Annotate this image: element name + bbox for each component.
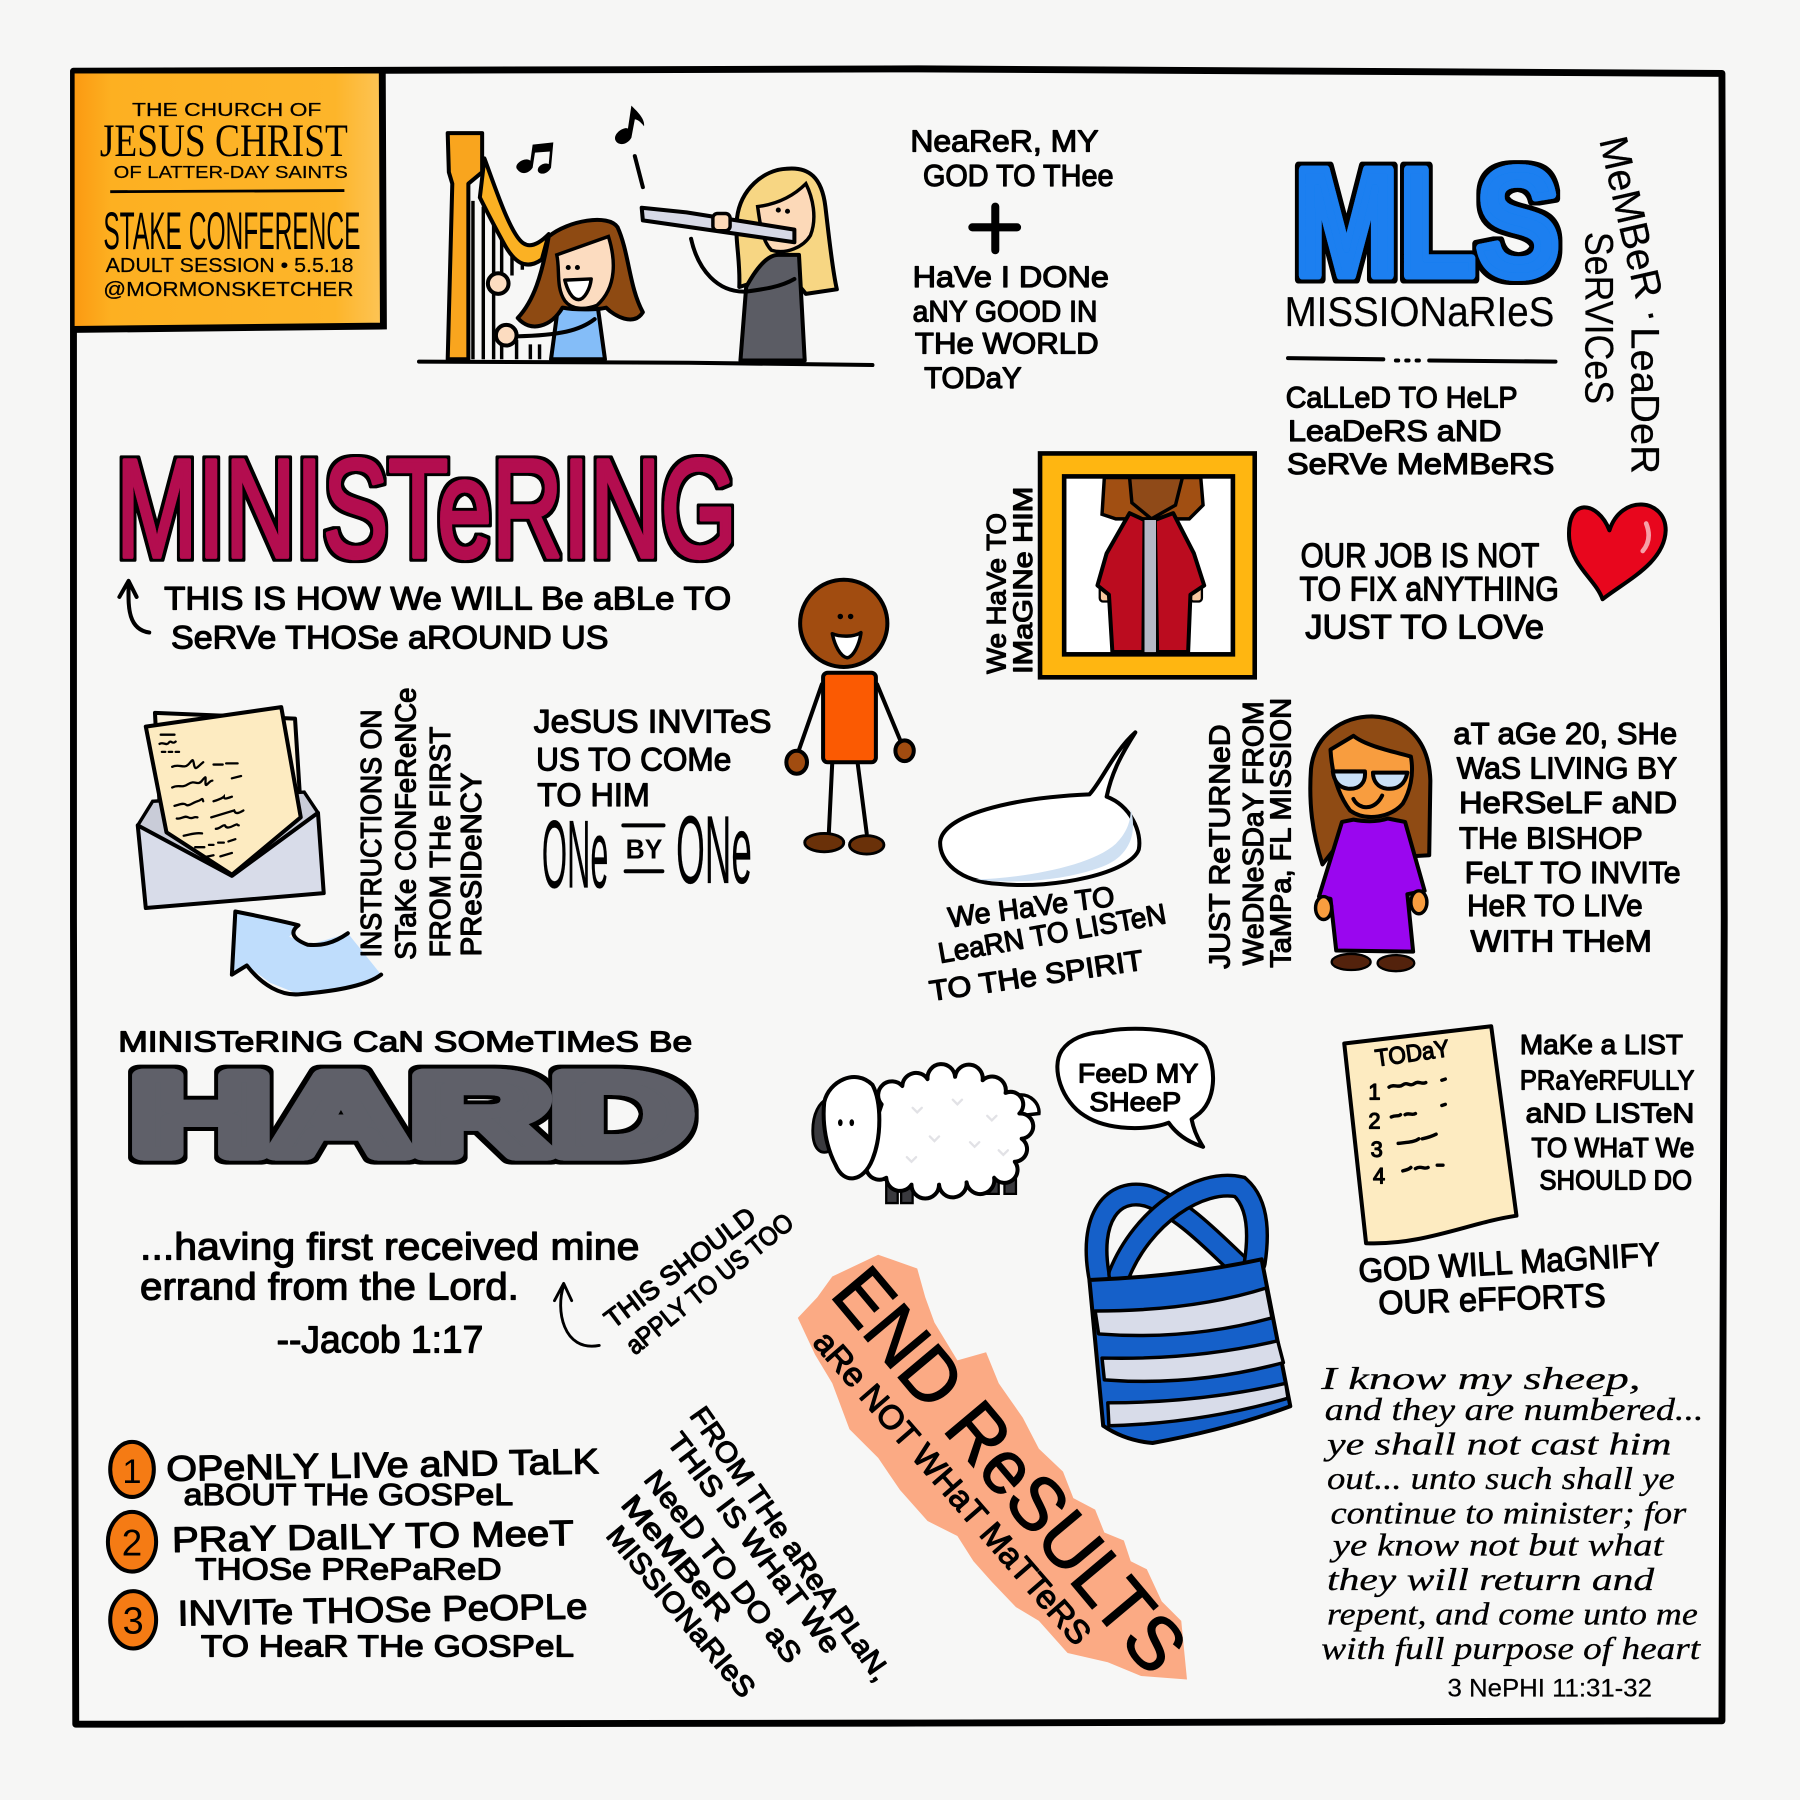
caption: learn to listen to the spirit: LeaRN TO LISTeN <box>936 898 1169 970</box>
icon: checklist paper: 3 <box>1371 1137 1383 1162</box>
badge 1: 1 <box>122 1453 142 1491</box>
subheading with arrow <box>119 581 731 656</box>
icon: checklist paper: 4 <box>1373 1164 1385 1189</box>
heading: MLS: MLS <box>1294 137 1560 309</box>
MLS missionaries block: MISSIONaRIeS <box>1285 289 1554 335</box>
text: at age 20 story: THe BISHOP <box>1459 820 1643 855</box>
vertical text: member leader services: SeRVICeS <box>1576 232 1621 404</box>
icon: sheep <box>813 1064 1039 1203</box>
title block: conference banner: THE CHURCH OF <box>132 99 321 120</box>
text: Jesus invites us one by one <box>534 703 771 908</box>
text: make a list prayerfully: PRaYeRFULLY <box>1520 1064 1694 1095</box>
figure: girl with glasses <box>1310 716 1430 971</box>
text: ministering can sometimes be: MINISTeRING CaN SOMeTIMeS Be <box>118 1027 692 1059</box>
text: our job is not to fix anything <box>1299 537 1559 646</box>
scripture quote: they will return and <box>1327 1561 1655 1597</box>
text: make a list prayerfully: TO WHaT We <box>1531 1132 1694 1163</box>
speech bubble: feed my sheep: FeeD MY <box>1078 1059 1199 1089</box>
text: our job is not to fix anything: OUR JOB IS NOT <box>1301 537 1539 575</box>
text: Jesus invites us one by one: JeSUS INVITeS <box>534 703 771 739</box>
arrow: curved up arrow <box>554 1283 599 1346</box>
vertical text: just returned from Tampa mission <box>1204 698 1297 969</box>
icon: envelope with letter <box>138 707 324 908</box>
diagonal text: from the area plan <box>600 1401 897 1704</box>
illustration: harpist and flautist <box>419 106 872 365</box>
vertical text: instructions on stake conference: FROM THe FIRST <box>425 727 457 957</box>
text: God will magnify our efforts <box>1358 1236 1661 1322</box>
scripture quote: 3 NePHI 11:31-32 <box>1448 1675 1652 1703</box>
text: at age 20 story: HeR TO LIVe <box>1467 888 1643 923</box>
heading: ministering: MINISTeRING <box>116 430 737 587</box>
vertical text: member leader services: LeaDeR <box>1622 327 1667 474</box>
flautist <box>642 168 837 360</box>
text: make a list prayerfully <box>1520 1029 1694 1195</box>
subheading with arrow: THIS IS HOW We WILL Be aBLe TO <box>164 581 731 617</box>
item 3: INVITe THOSe PeOPLe <box>177 1586 588 1634</box>
item 2: THOSe PRePaReD <box>195 1552 502 1587</box>
item 3 <box>177 1586 588 1664</box>
scripture quote: ye know not but what <box>1329 1526 1665 1562</box>
text: at age 20 story <box>1453 716 1681 959</box>
title block: conference banner <box>73 72 383 329</box>
music notes <box>516 106 644 187</box>
speech bubble: feed my sheep <box>1057 1029 1213 1147</box>
banner: end results: aRe NOT WHaT MaTTeRS <box>806 1324 1098 1652</box>
badge 3: 3 <box>123 1601 144 1643</box>
vertical text: just returned from Tampa mission: JUST ReTURNeD <box>1204 724 1236 969</box>
harp <box>448 133 549 359</box>
icon: striped tote bag <box>1089 1186 1290 1443</box>
bag handles <box>1097 1186 1257 1280</box>
subheading with arrow: SeRVe THOSe aROUND US <box>171 620 608 656</box>
vertical text: member leader services: MeMBeR · <box>1590 132 1677 327</box>
icon: checklist paper: 2 <box>1368 1108 1380 1133</box>
item 1: OPeNLY LIVe aND TaLK <box>166 1441 600 1489</box>
vertical text: just returned from Tampa mission: WeDNeSDaY FROM <box>1238 701 1270 965</box>
caption: learn to listen to the spirit: TO THe SPIRIT <box>927 945 1146 1008</box>
figure: boy <box>786 580 914 854</box>
hymn titles: aNY GOOD IN <box>913 295 1097 328</box>
icon: checklist paper: TODaY <box>1373 1035 1451 1072</box>
speech bubble: empty <box>940 732 1139 885</box>
hymn titles: NeaReR, MY <box>910 124 1099 159</box>
item 2 <box>172 1513 574 1587</box>
vertical caption: we have to imagine him: IMaGINe HIM <box>1008 487 1038 674</box>
title block: conference banner: ADULT SESSION • 5.5.18 <box>106 254 354 277</box>
text: Jesus invites us one by one: ONe <box>542 801 608 908</box>
quote: Jacob 1:17: ...having first received mine <box>140 1226 639 1268</box>
diagonal text: from the area plan: MISSIONaRIeS <box>600 1520 761 1704</box>
text: Jesus invites us one by one: US TO COMe <box>536 741 731 777</box>
item 1: aBOUT THe GOSPeL <box>184 1477 513 1512</box>
diagonal text: from the area plan: NeeD TO DO aS <box>637 1464 807 1669</box>
caption: learn to listen to the spirit: We HaVe TO <box>946 881 1116 934</box>
text: make a list prayerfully: aND LISTeN <box>1526 1098 1694 1129</box>
vertical text: just returned from Tampa mission: TaMPa, FL MISSION <box>1265 698 1297 968</box>
framed picture of Jesus <box>1040 453 1255 677</box>
heading: hard: HARD <box>131 1052 691 1179</box>
text: make a list prayerfully: MaKe a LIST <box>1520 1029 1683 1060</box>
diagonal text: from the area plan: MeMBeR <box>615 1489 738 1627</box>
item 2: PRaY DaILY TO MeeT <box>172 1513 574 1560</box>
vertical caption: we have to imagine him: We HaVe TO <box>982 513 1012 674</box>
scripture quote: continue to minister; for <box>1330 1494 1687 1530</box>
scripture quote <box>1320 1360 1704 1703</box>
title block: conference banner: STAKE CONFERENCE <box>103 202 360 261</box>
text: God will magnify our efforts: OUR eFFORTS <box>1378 1277 1606 1322</box>
badge 1 <box>110 1442 154 1497</box>
text: this should apply to us too: aPPLY TO US TOO <box>620 1207 799 1360</box>
item 3: TO HeaR THe GOSPeL <box>201 1629 574 1664</box>
scripture quote: with full purpose of heart <box>1321 1630 1701 1666</box>
MLS missionaries block: SeRVe MeMBeRS <box>1287 448 1554 481</box>
title block: conference banner: OF LATTER-DAY SAINTS <box>114 162 348 182</box>
hymn titles: THe WORLD <box>915 328 1099 361</box>
text: at age 20 story: WITH THeM <box>1471 924 1652 959</box>
quote: Jacob 1:17: errand from the Lord. <box>140 1266 519 1308</box>
vertical text: instructions on stake conference: PReSIDeNCY <box>456 773 488 956</box>
hymn titles: HaVe I DONe <box>913 261 1109 294</box>
text: at age 20 story: FeLT TO INVITe <box>1465 855 1681 890</box>
icon: red heart <box>1569 504 1666 599</box>
scripture quote: and they are numbered... <box>1325 1391 1704 1427</box>
icon: checklist paper <box>1344 1026 1516 1243</box>
vertical caption: we have to imagine him <box>982 487 1038 674</box>
title block: conference banner: JESUS CHRIST <box>100 115 348 167</box>
speech bubble: feed my sheep: SHeeP <box>1089 1087 1181 1117</box>
diagonal text: from the area plan: FROM THe aReA PLaN, <box>683 1401 897 1687</box>
stage line <box>419 362 872 365</box>
hymn titles: TODaY <box>924 362 1022 395</box>
text: at age 20 story: HeRSeLF aND <box>1459 785 1677 820</box>
hymn titles <box>910 124 1114 395</box>
numbered list <box>108 1441 600 1664</box>
text: Jesus invites us one by one: TO HIM <box>537 777 650 813</box>
MLS missionaries block: LeaDeRS aND <box>1288 415 1502 448</box>
caption: learn to listen to the spirit <box>927 881 1169 1008</box>
title block: conference banner: @MORMONSKETCHER <box>103 278 354 301</box>
text: at age 20 story: WaS LIVING BY <box>1457 750 1677 785</box>
badge 2: 2 <box>122 1522 142 1563</box>
quote: Jacob 1:17: --Jacob 1:17 <box>277 1319 483 1361</box>
scripture quote: I know my sheep, <box>1320 1360 1640 1396</box>
badge 2 <box>108 1512 156 1572</box>
scripture quote: out... unto such shall ye <box>1327 1460 1675 1496</box>
banner: end results: END ReSULTS <box>816 1251 1203 1689</box>
text: this should apply to us too: THIS SHOULD <box>599 1201 761 1334</box>
vertical text: instructions on stake conference <box>356 688 488 960</box>
quote: Jacob 1:17 <box>140 1226 639 1361</box>
vertical text: instructions on stake conference: STaKe CONFeReNCe <box>391 688 423 960</box>
diagonal text: from the area plan: THIS IS WHaT We <box>660 1427 847 1660</box>
text: God will magnify our efforts: GOD WILL MaGNIFY <box>1358 1236 1661 1290</box>
text: ONe <box>676 797 752 904</box>
scripture quote: repent, and come unto me <box>1327 1595 1698 1631</box>
MLS missionaries block: CaLLeD TO HeLP <box>1286 382 1518 415</box>
arrow: curved blue arrow to envelope <box>232 911 381 994</box>
text: make a list prayerfully: SHOULD DO <box>1539 1164 1692 1195</box>
vertical text: instructions on stake conference: INSTRUCTIONS ON <box>356 709 388 957</box>
scripture quote: ye shall not cast him <box>1323 1425 1671 1461</box>
badge 3 <box>110 1591 156 1648</box>
text: our job is not to fix anything: TO FIX aNYTHING <box>1299 570 1559 608</box>
item 1 <box>166 1441 600 1512</box>
hymn titles: GOD TO THee <box>923 158 1114 193</box>
vertical text: member leader services <box>1576 132 1677 474</box>
icon: checklist paper: 1 <box>1368 1080 1380 1105</box>
text: Jesus invites us one by one: BY <box>626 834 662 865</box>
harpist <box>488 220 643 359</box>
text: at age 20 story: aT aGe 20, SHe <box>1453 716 1677 751</box>
text: our job is not to fix anything: JUST TO LOVe <box>1305 608 1544 646</box>
MLS missionaries block <box>1285 137 1560 481</box>
